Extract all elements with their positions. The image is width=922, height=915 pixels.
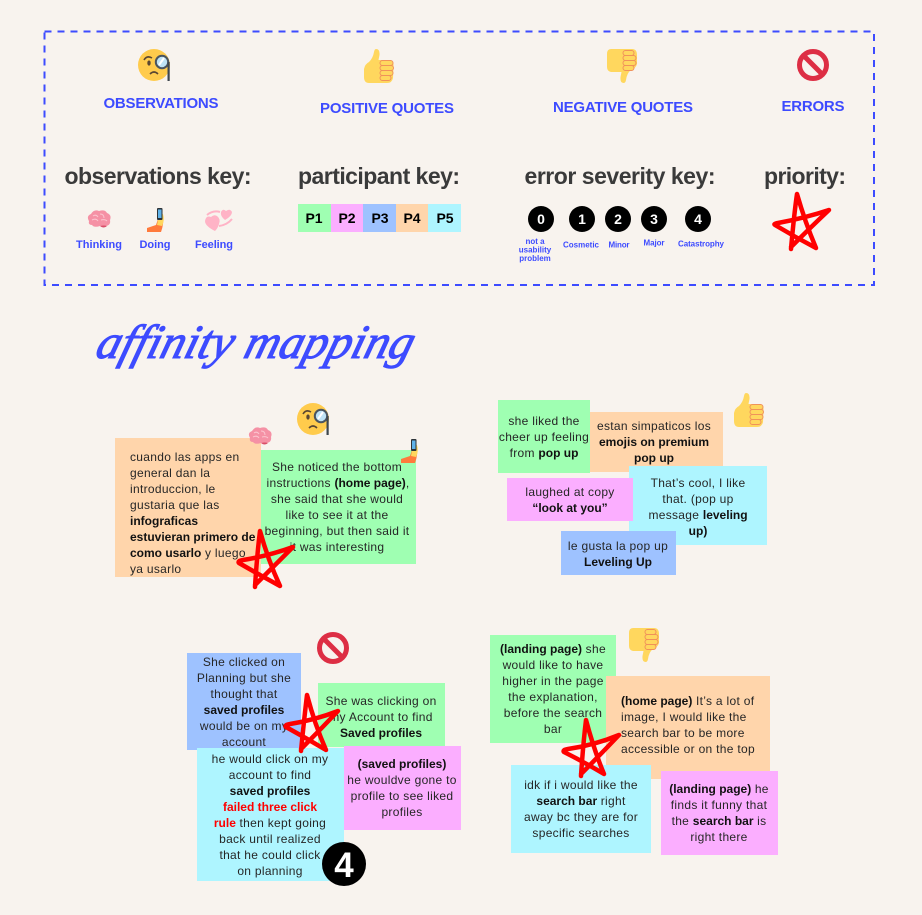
severity label: not a usability problem: problem [519,254,551,263]
note: orange observation: cuando las apps en [130,450,239,464]
heading: participant key: participant key: [298,163,460,189]
heading: errors: ERRORS [782,98,844,115]
severity label: cosmetic: Cosmetic [563,240,600,250]
participant key swatches: P5 [436,210,454,226]
severity 2: 2 [614,211,622,227]
icon: priority star [774,194,829,249]
heading: error severity key: error severity key: [524,163,716,189]
panel: legend [44,32,874,285]
note: pink negative: (landing page) he [669,782,769,796]
note: pink negative: right there [690,830,748,844]
note: green positive [498,400,590,473]
note: pink positive: “look at you” [532,501,608,515]
note: green observation: it was interesting [290,540,384,554]
note: orange positive [590,412,723,472]
note: green error: Saved profiles [340,726,422,740]
participant key swatches: P4 [403,210,421,226]
heading: observations: OBSERVATIONS [104,95,218,112]
icon: doing phone [147,208,164,232]
note: orange observation [115,438,261,577]
note: cyan error: on planning [237,864,303,878]
panel: errors cluster [187,634,461,886]
title: affinity mapping: affinity mapping [91,315,422,369]
icon: priority star [286,695,338,751]
note: orange negative: accessible or on the top [621,742,755,756]
note: cyan error: failed three click [223,800,317,814]
panel: positive quotes cluster [498,393,767,575]
note: green error: She was clicking on [325,694,437,708]
icon: thumbs down [629,628,659,662]
note: cyan positive: up) [689,524,707,538]
heading: observations key: observations key: [64,163,252,189]
note: cyan positive: that. (pop up [662,492,734,506]
note: blue error: would be on my [199,719,288,733]
severity 1: 1 [578,211,586,227]
note: green observation: she said that she would [271,492,403,506]
icon: priority star [564,720,619,776]
note: blue error: Planning but she [197,671,291,685]
icon: thinking brain [88,210,111,228]
icon: doing phone [401,439,418,463]
icon: thumbs down [607,49,637,83]
note: green observation: like to see it at the [285,508,389,522]
note: orange observation: general dan la [130,466,210,480]
icon: observations monocle face [138,49,170,81]
heading: priority: priority: [764,163,846,189]
heading: positive quotes: POSITIVE QUOTES [320,100,454,117]
note: green error [318,683,445,747]
label: thinking: Thinking [76,239,122,251]
note: blue error: thought that [210,687,278,701]
note: green negative: the explanation, [508,690,598,704]
severity label: not a usability problem: not a [525,237,545,246]
label: feeling: Feeling [195,239,233,251]
severity 1 [569,206,595,232]
icon: monocle face [297,403,329,435]
participant key swatches [298,204,461,232]
note: green positive: cheer up feeling [499,430,589,444]
note: pink error [344,746,461,830]
severity 4: 4 [694,211,702,227]
note: cyan negative: away bc they are for [524,810,638,824]
icon: thumbs up [734,393,764,427]
note: green positive: she liked the [508,414,580,428]
panel: observations cluster [115,403,418,587]
note: blue positive [561,531,676,575]
severity 2 [605,206,631,232]
severity 3: 3 [650,211,658,227]
note: pink positive [507,478,633,521]
severity label: minor: Minor [608,240,630,250]
severity label: major: Major [644,238,664,248]
icon: no entry [320,634,346,662]
icon: feeling hearts [205,210,232,231]
severity 0: 0 [537,211,545,227]
heading: negative quotes: NEGATIVE QUOTES [553,99,693,116]
note: orange observation: estuvieran primero de [130,530,256,544]
note: cyan error: that he could click [219,848,321,862]
note: green positive: from pop up [510,446,578,460]
note: green negative [490,635,616,743]
severity 4 [685,206,711,232]
note: orange negative [606,676,770,779]
note: pink negative: finds it funny that [671,798,768,812]
note: blue error: account [222,735,266,749]
note: green observation: beginning, but then said it [265,524,410,538]
participant key swatches: P1 [305,210,323,226]
note: green negative: bar [544,722,562,736]
note: cyan error: account to find [229,768,311,782]
note: green observation: instructions (home page), [267,476,409,490]
note: green negative: (landing page) she [500,642,606,656]
note: cyan negative: idk if i would like the [524,778,638,792]
note: orange positive: emojis on premium [599,435,709,449]
note: orange observation: infograficas [130,514,198,528]
note: cyan error: he would click on my [212,752,328,766]
note: pink error: profiles [381,805,423,819]
icon: thinking brain [249,427,272,444]
note: cyan error: saved profiles [230,784,311,798]
note: pink positive: laughed at copy [525,485,615,499]
icon: priority star [238,531,293,587]
severity badge 4: 4 [334,846,354,885]
note: cyan error: rule then kept going [214,816,326,830]
note: green error: my Account to find [329,710,433,724]
note: green observation: She noticed the bottom [272,460,402,474]
label: doing: Doing [140,239,170,251]
note: orange observation: ya usarlo [130,562,181,576]
note: blue error: saved profiles [204,703,285,717]
note: orange positive: estan simpaticos los [597,419,711,433]
note: cyan error: back until realized [219,832,321,846]
note: cyan positive: That’s cool, I like [651,476,745,490]
note: pink error: profile to see liked [351,789,453,803]
note: cyan negative [511,765,651,853]
severity label: not a usability problem [519,237,552,263]
note: pink error: (saved profiles) [358,757,446,771]
icon: thumbs up [364,49,394,83]
severity badge 4 [322,842,366,886]
note: orange observation: como usarlo y luego [130,546,246,560]
participant key swatches: P3 [371,210,389,226]
participant key swatches: P2 [338,210,356,226]
note: pink negative: the search bar is [672,814,766,828]
severity 0 [528,206,554,232]
note: blue positive: Leveling Up [584,555,652,569]
note: cyan error [197,748,344,881]
note: orange observation: gustaria que las [130,498,220,512]
severity 3 [641,206,667,232]
note: blue error: She clicked on [203,655,285,669]
note: cyan negative: search bar right [536,794,626,808]
icon: errors no entry [800,52,826,78]
note: green negative: before the search [504,706,602,720]
note: pink error: he wouldve gone to [347,773,457,787]
note: green negative: would like to have [502,658,603,672]
note: orange negative: image, I would like the [621,710,747,724]
note: green observation [261,450,416,564]
note: blue error [187,653,301,750]
note: pink negative [661,771,778,855]
note: orange negative: search bar to be more [621,726,745,740]
note: green negative: higher in the page [502,674,604,688]
note: orange negative: (home page) It’s a lot of [621,694,755,708]
note: orange observation: introduccion, le [130,482,216,496]
panel: negative quotes cluster [490,628,778,855]
note: orange positive: pop up [634,451,674,465]
note: cyan positive: message leveling [648,508,748,522]
severity label: catastrophy: Catastrophy [678,240,725,248]
note: blue positive: le gusta la pop up [568,539,668,553]
note: cyan positive [629,466,767,545]
note: cyan negative: specific searches [532,826,630,840]
severity label: not a usability problem: usability [519,246,552,254]
